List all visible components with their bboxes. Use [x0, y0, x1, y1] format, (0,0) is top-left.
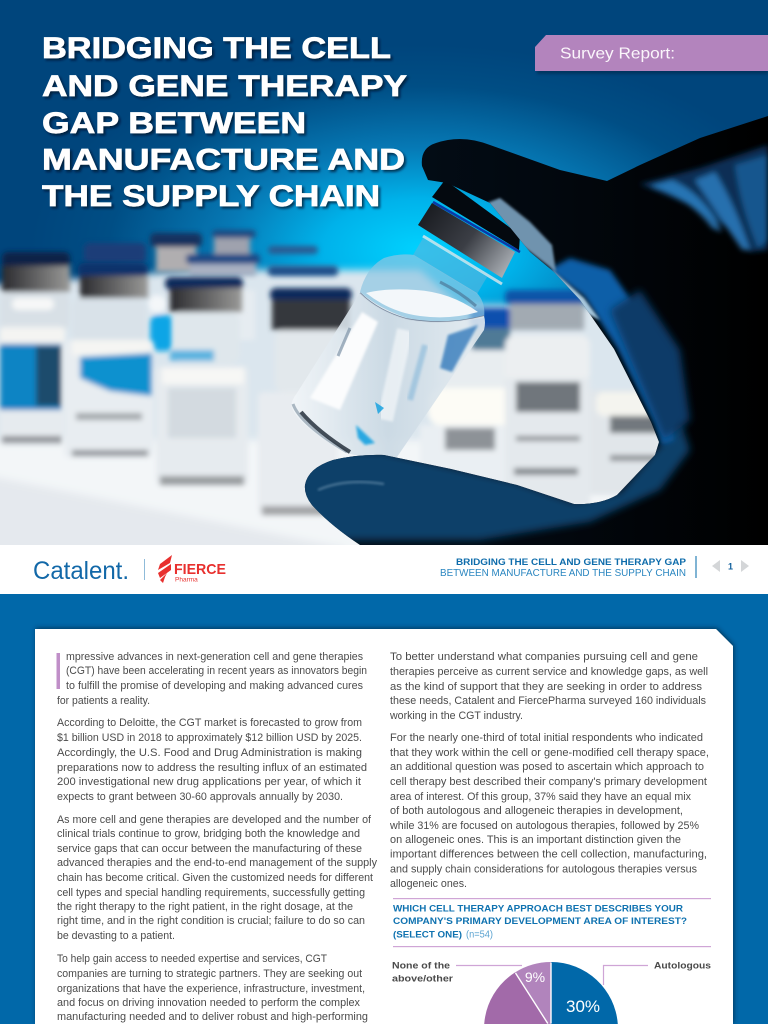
- left column text: companies are turning to strategic partners. They are seeking out: [57, 968, 362, 980]
- left column text: [57, 651, 378, 1023]
- back row of vials: [84, 230, 338, 351]
- right column text: an additional question was posed to ascertain which approach to: [390, 761, 704, 773]
- vial thick glass base: [293, 404, 347, 452]
- label: none of the above: above/other: [392, 974, 453, 984]
- vial 1 with blue label: [0, 252, 70, 446]
- running header text: BRIDGING THE CELL AND GENE THERAPY GAP: [456, 557, 687, 568]
- right column text: as the kind of support that they are seeking in order to address: [390, 681, 702, 693]
- left column text: chain has become critical. Given the customized needs for different: [57, 872, 373, 884]
- label: 9%: 9%: [525, 969, 545, 985]
- left column text: to fulfill the promise of developing and making advanced cures: [66, 680, 363, 692]
- right column text: area of interest. Of this group, 37% said they have an equal mix: [390, 791, 692, 803]
- left column text: 200 investigational new drug applications per year, of which it: [57, 776, 361, 788]
- left column text: preparations now to address the resulting influx of an estimated: [57, 762, 367, 774]
- blue page background: [0, 594, 768, 1024]
- left column text: right time, and in the right condition is crucial; failure to do so can: [57, 915, 365, 927]
- thumb highlight: [318, 482, 384, 490]
- right column text: [389, 651, 709, 890]
- drop cap bar: [56, 653, 60, 689]
- title: THE SUPPLY CHAIN: [42, 180, 380, 213]
- left column text: Accordingly, the U.S. Food and Drug Administration is making: [57, 747, 362, 759]
- fold blue: [548, 258, 674, 445]
- chart title: [393, 904, 687, 940]
- survey report tab: Survey Report:: [560, 46, 675, 62]
- page navigation: 1: [728, 562, 733, 572]
- shelf: [0, 264, 659, 545]
- chart title: WHICH CELL THERAPY APPROACH BEST DESCRIBES YOUR: [393, 904, 683, 914]
- Fierce Pharma logo: [158, 555, 226, 584]
- chart title: (n=54): [466, 930, 493, 940]
- left column text: and focus on driving innovation needed to perform the complex: [57, 997, 361, 1009]
- chart title: (SELECT ONE): [393, 930, 462, 940]
- vial 4 pale: [258, 288, 352, 516]
- title: AND GENE THERAPY: [42, 70, 407, 103]
- vial 2 with blue label: [64, 263, 154, 458]
- right column text: To better understand what companies pursuing cell and gene: [390, 651, 698, 663]
- left column text: be devasting to a patient.: [57, 930, 175, 942]
- Catalent logo: Catalent.: [33, 557, 129, 585]
- Fierce Pharma logo: Pharma: [175, 576, 198, 584]
- thumb blue: [300, 420, 690, 540]
- chart: cell therapy approach pie: [392, 898, 711, 1024]
- glove shading: [300, 198, 690, 540]
- left column text: clinical trials continue to grow, bridging both the knowledge and: [57, 828, 360, 840]
- right column text: cell therapy best described their company's primary development: [390, 776, 707, 788]
- title: BRIDGING THE CELL: [42, 32, 391, 65]
- pie slices, cut by the page edge: [484, 962, 618, 1024]
- white header band: [0, 545, 768, 594]
- cover photo: gloved hand holding a vial: [0, 0, 768, 565]
- right column text: and supply chain considerations for autologous therapies versus: [390, 864, 697, 876]
- right column text: working in the CGT industry.: [389, 710, 523, 722]
- left column text: $1 billion USD in 2018 to approximately $12 billion USD by 2025.: [57, 732, 362, 744]
- right column text: while 31% are focused on autologous therapies, followed by 25%: [389, 820, 700, 832]
- left column text: the right therapy to the right patient, in the right dosage, at the: [57, 901, 353, 913]
- right column text: these needs, Catalent and FiercePharma surveyed 160 individuals: [390, 695, 706, 707]
- survey report tab: [535, 35, 768, 74]
- right column text: of both autologous and allogeneic therapies in development,: [390, 805, 683, 817]
- vial 3 pale: [156, 277, 248, 486]
- left column text: service gaps that can occur between the manufacturing of these: [57, 843, 362, 855]
- Fierce Pharma logo: FIERCE: [174, 561, 226, 578]
- left column text: for patients a reality.: [57, 695, 150, 707]
- label: autologous: Autologous: [654, 960, 711, 972]
- title: MANUFACTURE AND: [42, 144, 405, 176]
- chart title: COMPANY'S PRIMARY DEVELOPMENT AREA OF INTEREST?: [393, 916, 687, 927]
- right column text: For the nearly one-third of total initial respondents who indicated: [390, 732, 703, 744]
- white content card: [35, 629, 733, 1024]
- held glass vial: [292, 180, 520, 459]
- right column text: important differences between the cell collection, manufacturing,: [390, 848, 707, 860]
- glove top right highlights: [640, 145, 768, 252]
- label: none of the above: [392, 960, 522, 984]
- white header band: BETWEEN MANUFACTURE AND THE SUPPLY CHAIN: [440, 568, 686, 579]
- right column text: therapies perceive as current service and knowledge gaps, as well: [390, 666, 708, 678]
- left column text: According to Deloitte, the CGT market is forecasted to grow from: [57, 717, 362, 729]
- left column text: As more cell and gene therapies are developed and the number of: [57, 814, 371, 826]
- vial glass body: [292, 293, 485, 459]
- label: autologous: [604, 960, 711, 985]
- left column text: cell types and special handling requirements, successfully getting: [57, 887, 365, 899]
- label: 30%: 30%: [566, 997, 600, 1016]
- left column text: advanced therapies and the end-to-end management of the supply: [57, 857, 378, 869]
- blurred vials and shelf in the background: [0, 227, 659, 545]
- lit patch under finger: [487, 198, 556, 272]
- left column text: To help gain access to needed expertise and services, CGT: [57, 953, 328, 965]
- left column text: organizations that have the experience, infrastructure, investment,: [57, 983, 365, 995]
- label: none of the above: None of the: [392, 960, 450, 972]
- vial neck: [413, 238, 487, 294]
- vial metal collar: [418, 203, 515, 278]
- right column text: allogeneic ones.: [390, 878, 467, 890]
- glove silhouette: [305, 116, 768, 545]
- title: [42, 32, 407, 213]
- left column text: manufacturing needed and to deliver robust and high-performing: [57, 1011, 368, 1023]
- vials right of the held vial: [420, 290, 660, 505]
- vial stopper: [432, 180, 520, 250]
- right column text: that they work within the cell or gene-modified cell therapy space,: [390, 747, 709, 759]
- vial glass shoulder: [360, 254, 484, 322]
- title: GAP BETWEEN: [42, 107, 306, 140]
- black glove fingers and hand: [300, 116, 768, 545]
- page navigation: [712, 560, 749, 572]
- left column text: (CGT) have been accelerating in recent years as innovators begin: [66, 665, 367, 677]
- left column text: expects to grant between 30-60 approvals annually by 2030.: [57, 791, 343, 803]
- left column text: mpressive advances in next-generation cell and gene therapies: [66, 651, 363, 663]
- right column text: on allogeneic ones. This is an important distinction given the: [390, 834, 681, 846]
